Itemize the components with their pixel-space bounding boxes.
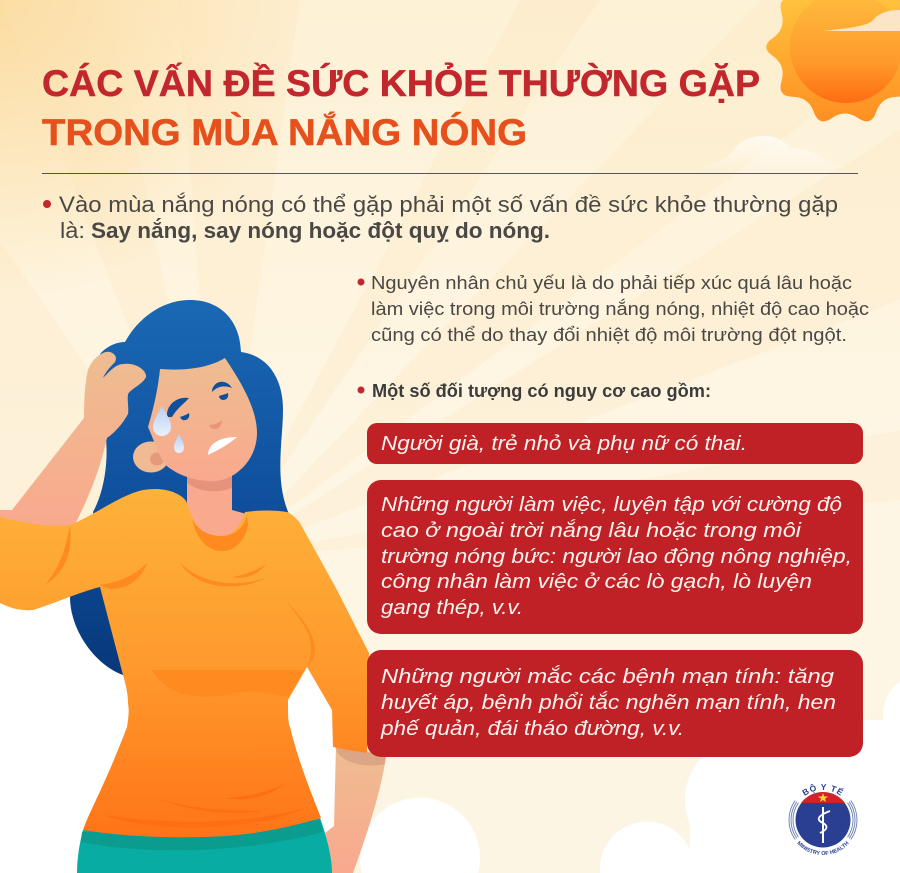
sun bbox=[766, 0, 900, 121]
box: outdoor workers: gang thép, v.v. bbox=[381, 596, 523, 619]
tears bbox=[153, 406, 184, 453]
mouth bbox=[208, 437, 237, 455]
face bbox=[148, 358, 257, 481]
causes text bbox=[358, 273, 869, 345]
logo: ministry of health: BỘ Y TẾ bbox=[802, 784, 844, 796]
intro bullet text: Say nắng, say nóng hoặc đột quỵ do nóng. bbox=[91, 218, 550, 243]
woman illustration bbox=[0, 300, 386, 873]
raised arm and hand bbox=[0, 352, 146, 530]
title: TRONG MÙA NẮNG NÓNG bbox=[42, 111, 527, 153]
title bbox=[42, 62, 760, 153]
causes text: Nguyên nhân chủ yếu là do phải tiếp xúc quá lâu hoặc bbox=[371, 273, 852, 293]
box: chronic diseases: huyết áp, bệnh phổi tắc nghẽn mạn tính, hen bbox=[381, 691, 836, 714]
box: chronic diseases bbox=[367, 650, 863, 757]
box: outdoor workers: cao ở ngoài trời nắng lâu hoặc trong môi bbox=[381, 519, 803, 542]
brows and eyes bbox=[167, 382, 232, 420]
right forearm bbox=[325, 745, 386, 873]
intro bullet text: Vào mùa nắng nóng có thể gặp phải một số vấn đề sức khỏe thường gặp bbox=[59, 192, 838, 217]
box: outdoor workers: trường nóng bức: người lao động nông nghiệp, bbox=[381, 545, 852, 568]
box: chronic diseases: phế quản, đái tháo đường, v.v. bbox=[380, 717, 684, 740]
hair bbox=[70, 300, 289, 675]
risk groups heading: Một số đối tượng có nguy cơ cao gồm: bbox=[372, 381, 711, 401]
neck bbox=[187, 470, 250, 545]
box: elderly, children, pregnant bbox=[367, 423, 863, 464]
nose bbox=[209, 420, 222, 429]
box: outdoor workers: công nhân làm việc ở các lò gạch, lò luyện bbox=[381, 570, 812, 593]
shirt bbox=[0, 489, 369, 837]
title: CÁC VẤN ĐỀ SỨC KHỎE THƯỜNG GẶP bbox=[42, 62, 760, 104]
causes text: làm việc trong môi trường nắng nóng, nhiệt độ cao hoặc bbox=[371, 298, 869, 319]
ear bbox=[133, 442, 169, 472]
shirt folds bbox=[45, 515, 315, 828]
box: elderly, children, pregnant: Người già, trẻ nhỏ và phụ nữ có thai. bbox=[381, 432, 747, 455]
intro bullet text bbox=[43, 192, 838, 243]
logo: ministry of health bbox=[788, 784, 858, 855]
intro bullet text: là: bbox=[60, 218, 85, 243]
box: outdoor workers: Những người làm việc, luyện tập với cường độ bbox=[381, 493, 842, 516]
box: chronic diseases: Những người mắc các bệnh mạn tính: tăng bbox=[381, 665, 835, 688]
box: outdoor workers bbox=[367, 480, 863, 634]
pants bbox=[77, 818, 332, 873]
causes text: cũng có thể do thay đổi nhiệt độ môi trường đột ngột. bbox=[371, 325, 847, 345]
logo: ministry of health: MINISTRY OF HEALTH bbox=[797, 840, 849, 855]
